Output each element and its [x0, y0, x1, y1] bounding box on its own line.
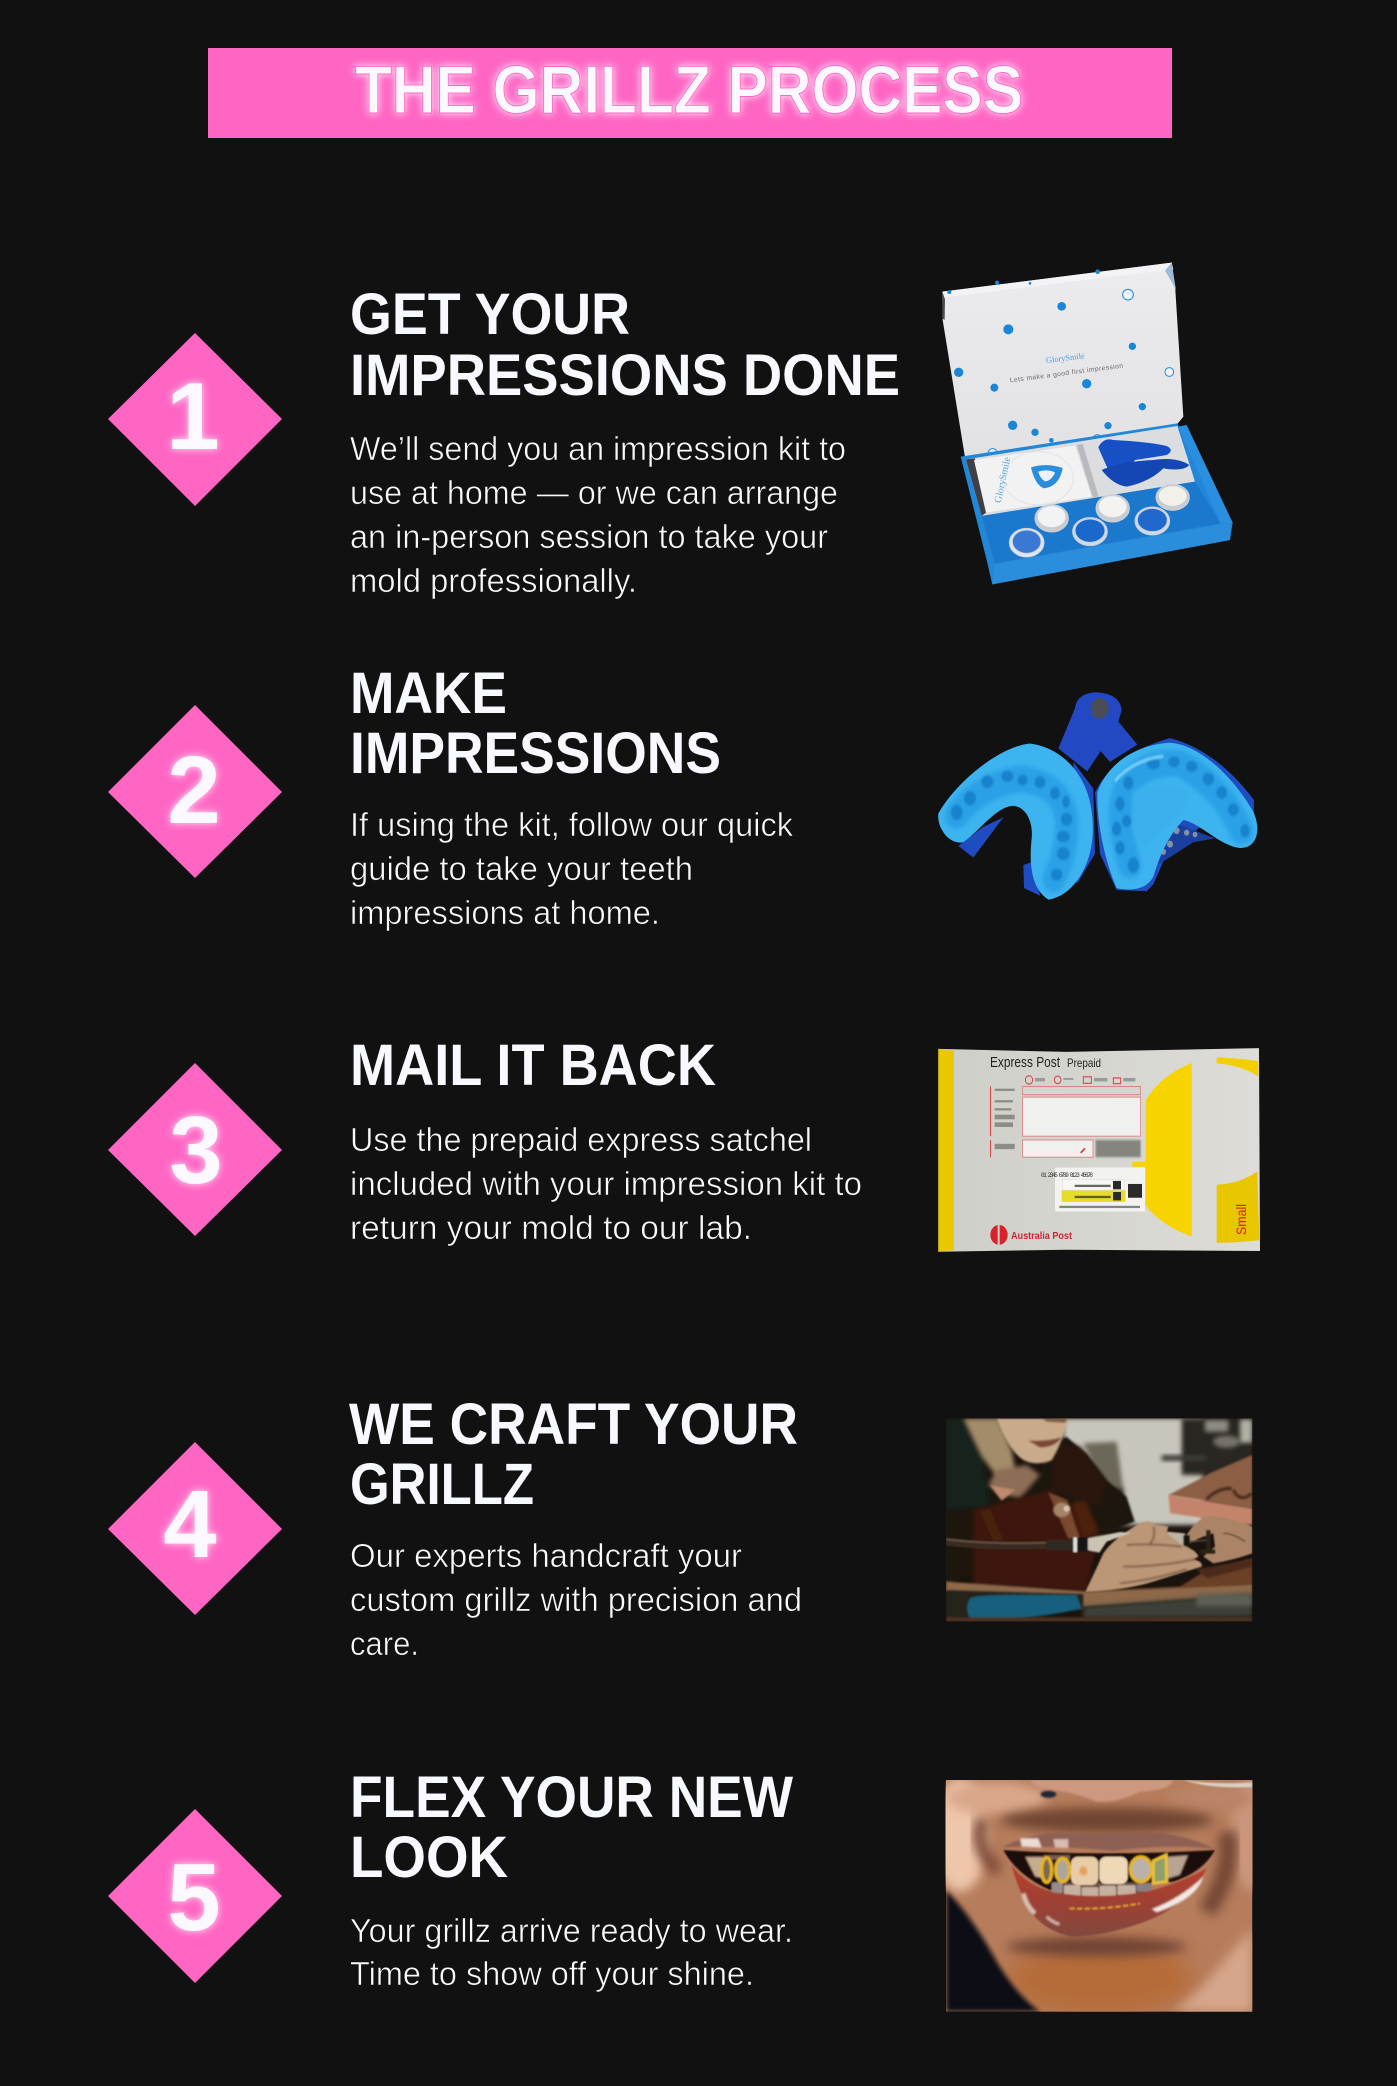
text: step 1: an in-person session to take your	[350, 518, 828, 555]
panel: step 3	[108, 1033, 1260, 1252]
image: express post satchel: Prepaid	[1067, 1056, 1101, 1070]
text: step 3: included with your impression kit to	[350, 1165, 862, 1202]
text: step 4	[350, 1537, 802, 1662]
text: step 4: custom grillz with precision and	[350, 1581, 802, 1618]
image: impression kit box: GlorySmile	[1046, 351, 1085, 365]
heading: step 4: WE CRAFT YOUR	[349, 1392, 798, 1457]
image: impression kit box: GlorySmile	[993, 456, 1013, 504]
text: step 1: use at home — or we can arrange	[350, 474, 838, 511]
heading: step 1	[350, 282, 900, 408]
text: step 5: Time to show off your shine.	[350, 1955, 754, 1992]
image: express post satchel	[938, 1048, 1260, 1252]
heading: step 4	[349, 1392, 798, 1517]
number badge 1: 1	[166, 363, 220, 470]
number badge 5: 5	[167, 1844, 221, 1951]
text: step 3: return your mold to our lab.	[350, 1209, 752, 1246]
image: express post satchel: Express Post	[990, 1054, 1061, 1071]
text: step 4: care.	[350, 1625, 419, 1662]
number badge 2	[108, 705, 282, 878]
image: express post satchel: Small	[1233, 1204, 1249, 1235]
image: express post satchel: Australia Post	[1011, 1230, 1072, 1242]
heading: step 2	[350, 661, 721, 786]
image: impression kit box	[942, 263, 1233, 584]
panel: step 5	[108, 1765, 1277, 2015]
title: THE GRILLZ PROCESS	[355, 52, 1023, 128]
text: step 2: If using the kit, follow our quick	[350, 806, 793, 843]
panel: step 2	[108, 661, 1257, 931]
number badge 1	[108, 333, 282, 506]
heading: step 2: IMPRESSIONS	[350, 721, 721, 786]
image: impression kit box: Lets make a good first impression	[1010, 363, 1124, 384]
text: step 2: impressions at home.	[350, 894, 660, 931]
text: step 3: Use the prepaid express satchel	[350, 1121, 812, 1158]
number badge 5	[108, 1809, 282, 1983]
text: step 1: mold professionally.	[350, 562, 637, 599]
panel: step 4	[108, 1392, 1252, 1662]
panel: step 1	[108, 263, 1233, 599]
image: smile with gold grillz	[946, 1780, 1252, 2012]
heading: step 5: LOOK	[350, 1825, 508, 1890]
image: dental impression trays	[938, 692, 1257, 900]
heading: step 3: MAIL IT BACK	[350, 1033, 716, 1098]
text: step 2	[350, 806, 793, 931]
heading: step 2: MAKE	[350, 661, 507, 726]
number badge 3	[108, 1063, 282, 1236]
number badge 2: 2	[167, 737, 221, 844]
text: step 1	[350, 430, 846, 599]
text: step 4: Our experts handcraft your	[350, 1537, 742, 1574]
number badge 4: 4	[163, 1471, 217, 1578]
heading: step 1: GET YOUR	[350, 282, 630, 347]
image: express post satchel: 01 2345 6789 0123 45678	[1041, 1172, 1093, 1179]
text: step 5: Your grillz arrive ready to wear.	[350, 1912, 793, 1949]
text: step 2: guide to take your teeth	[350, 850, 693, 887]
text: step 3	[350, 1121, 862, 1246]
text: step 5	[350, 1912, 793, 1992]
heading: step 4: GRILLZ	[350, 1452, 534, 1517]
text: step 1: We’ll send you an impression kit to	[350, 430, 846, 467]
number badge 4	[108, 1442, 282, 1615]
heading: step 1: IMPRESSIONS DONE	[350, 343, 900, 408]
number badge 3: 3	[169, 1097, 223, 1204]
heading: step 5	[350, 1765, 793, 1890]
image: craftsperson at workbench	[946, 1418, 1252, 1622]
heading: step 5: FLEX YOUR NEW	[350, 1765, 793, 1830]
title banner	[208, 48, 1172, 138]
